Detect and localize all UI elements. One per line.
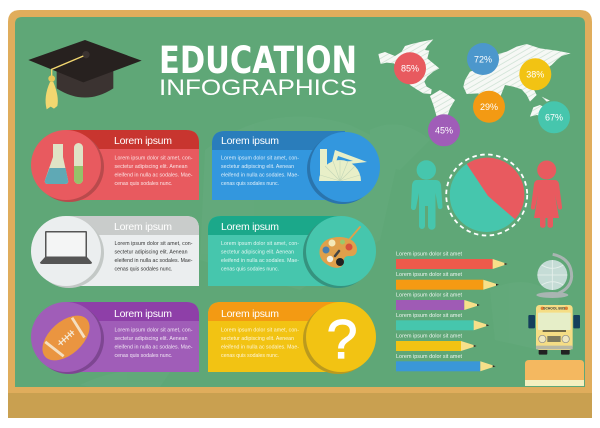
panel: geometry (212, 131, 380, 204)
icon: football (34, 307, 98, 369)
panel text: sectetur adipiscing elit. Aenean (114, 250, 188, 256)
panel text: Lorem ipsum dolor sit amet, con- (221, 156, 299, 162)
panel text: Lorem ipsum dolor sit amet, con- (114, 156, 193, 162)
panel text: Lorem ipsum dolor sit amet, con- (114, 241, 193, 247)
bar 2: Lorem ipsum dolor sit amet (396, 272, 462, 278)
percentage markers: 38% (526, 70, 544, 80)
percentage markers: 72% (474, 54, 492, 64)
panel text: eleifend in nulla ac sodales. Mae- (221, 172, 299, 178)
subtitle: Infographics: INFOGRAPHICS (159, 75, 357, 100)
panel heading: Lorem ipsum (221, 308, 279, 320)
panel text: cenas quis sodales nunc. (221, 181, 279, 187)
percentage markers: 85% (401, 64, 419, 74)
percentage markers: 45% (435, 126, 453, 136)
panel text (114, 241, 193, 272)
panel text: cenas quis sodales nunc. (221, 266, 279, 272)
panel text: cenas quis sodales nunc. (114, 266, 172, 272)
panel text (221, 156, 299, 187)
icon: laptop (40, 231, 92, 264)
panel text: cenas quis sodales nunc. (114, 181, 172, 187)
panel text (114, 156, 193, 187)
bar 1: Lorem ipsum dolor sit amet (396, 252, 462, 258)
panel heading: Lorem ipsum (114, 221, 172, 233)
bar 3: Lorem ipsum dolor sit amet (396, 292, 462, 298)
icon: flasks (45, 143, 83, 184)
icon: school bus: SCHOOL BUS (543, 306, 566, 310)
panel heading: Lorem ipsum (114, 135, 172, 147)
panel text: eleifend in nulla ac sodales. Mae- (114, 172, 193, 178)
panel: sports (31, 302, 199, 374)
panel text: eleifend in nulla ac sodales. Mae- (221, 344, 299, 350)
icon: female figure (531, 160, 562, 228)
panel text: Lorem ipsum dolor sit amet, con- (114, 328, 193, 334)
panel text: sectetur adipiscing elit. Aenean (114, 336, 188, 342)
panel: science (31, 130, 199, 202)
panel: questions (208, 302, 376, 374)
panel text: eleifend in nulla ac sodales. Mae- (114, 258, 193, 264)
panel text (114, 328, 193, 359)
percentage markers: 29% (480, 102, 498, 112)
panel heading: Lorem ipsum (114, 308, 172, 320)
icon: globe (536, 254, 572, 298)
panel text (221, 328, 299, 359)
panel text: sectetur adipiscing elit. Aenean (221, 250, 294, 256)
icon: school bus (528, 305, 580, 355)
icon: palette (320, 227, 360, 268)
pencil bar chart (396, 252, 508, 371)
world map (378, 39, 571, 127)
panel text: cenas quis sodales nunc. (114, 353, 172, 359)
panel: computing (31, 216, 199, 288)
panel text: sectetur adipiscing elit. Aenean (221, 336, 294, 342)
panel text: eleifend in nulla ac sodales. Mae- (221, 258, 299, 264)
panel text: cenas quis sodales nunc. (221, 353, 279, 359)
icon: graduation cap (28, 40, 142, 109)
panel: art (208, 216, 376, 288)
panel heading: Lorem ipsum (221, 221, 279, 233)
icon: male figure (411, 160, 442, 230)
icon: question mark: ? (327, 308, 357, 370)
title: Education: EDUCATION (159, 39, 357, 82)
panel heading: Lorem ipsum (221, 135, 279, 147)
panel text: Lorem ipsum dolor sit amet, con- (221, 328, 299, 334)
panel text (221, 241, 299, 272)
panel text: Lorem ipsum dolor sit amet, con- (221, 241, 299, 247)
panel text: eleifend in nulla ac sodales. Mae- (114, 344, 193, 350)
bar 6: Lorem ipsum dolor sit amet (396, 354, 462, 360)
percentage markers: 67% (545, 112, 563, 122)
percentage markers (394, 43, 570, 146)
bar 5: Lorem ipsum dolor sit amet (396, 334, 462, 340)
pie chart (446, 154, 527, 236)
icon: ruler and protractor (319, 149, 367, 181)
bar 4: Lorem ipsum dolor sit amet (396, 313, 462, 319)
panel text: sectetur adipiscing elit. Aenean (221, 164, 294, 170)
panel text: sectetur adipiscing elit. Aenean (114, 164, 188, 170)
icon: book (525, 360, 584, 386)
